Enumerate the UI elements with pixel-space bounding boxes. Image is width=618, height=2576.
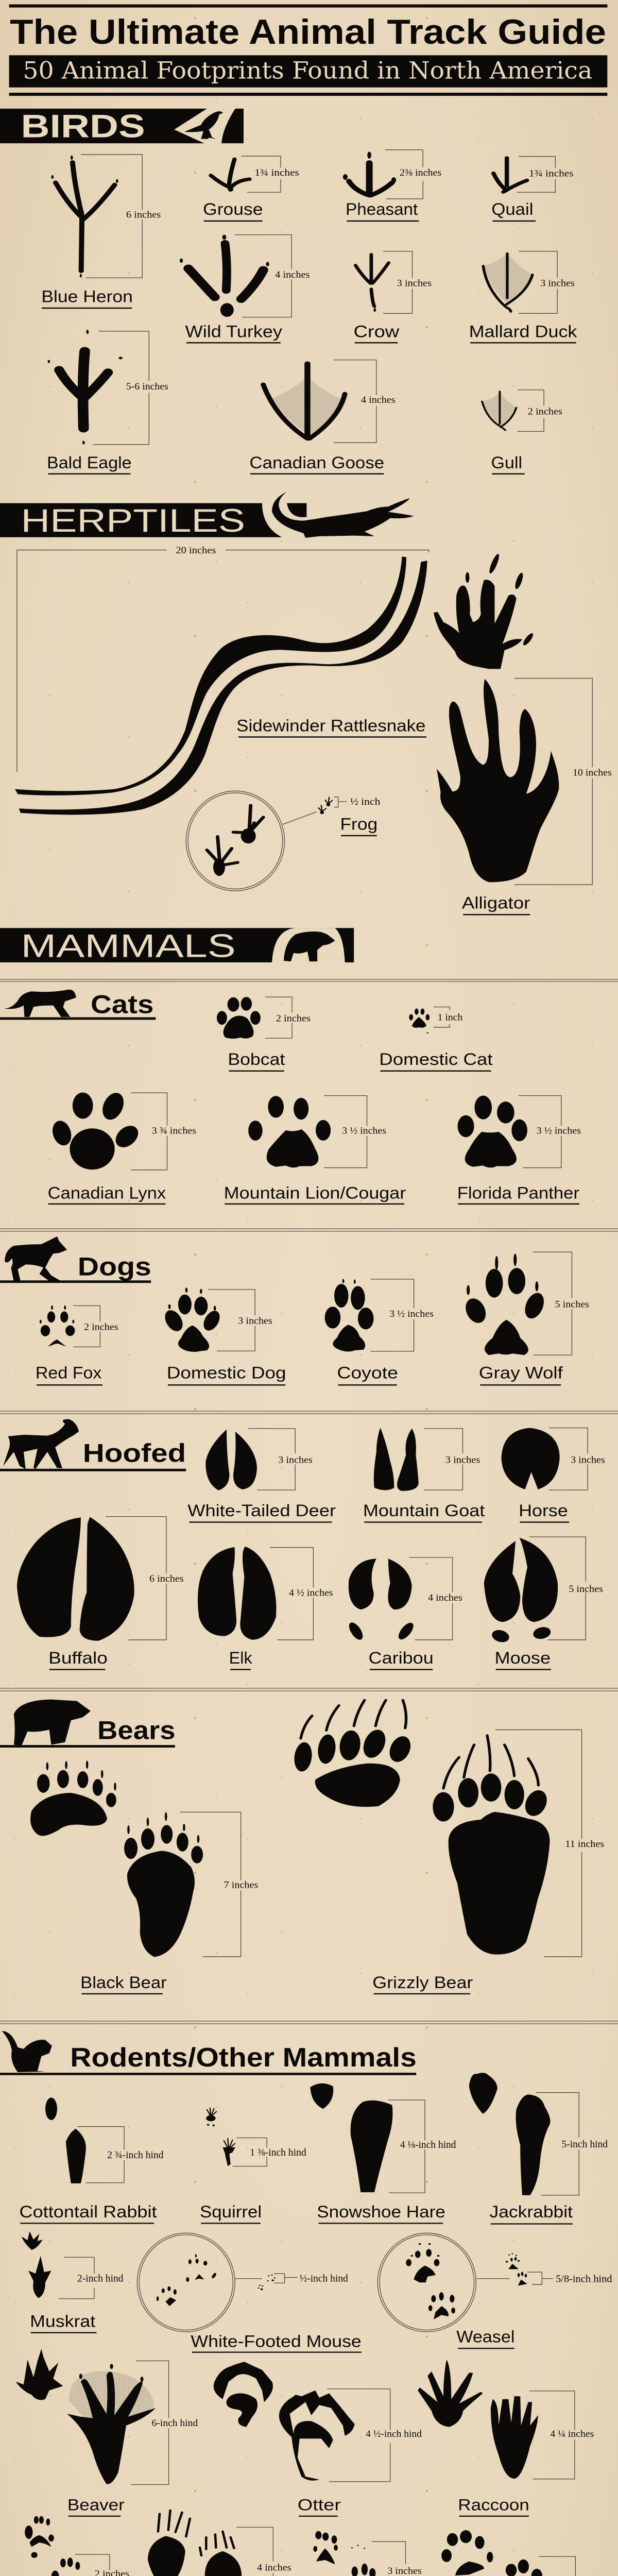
measurement <box>274 2273 348 2284</box>
measurement: 2 inches <box>276 1012 311 1024</box>
name: Quail <box>491 200 533 218</box>
track icon <box>441 2530 553 2576</box>
name: Caribou <box>369 1649 434 1667</box>
measurement: 3 ½ inches <box>389 1308 434 1319</box>
measurement <box>527 2272 612 2284</box>
name: Bald Eagle <box>47 453 132 472</box>
track icon <box>374 1428 419 1491</box>
name: Elk <box>229 1649 252 1667</box>
track icon <box>484 1538 558 1645</box>
measurement: 11 inches <box>565 1838 604 1850</box>
measurement <box>59 2257 124 2299</box>
track icon <box>22 2231 51 2298</box>
measurement: 3 inches <box>445 1454 480 1465</box>
front track <box>434 553 535 669</box>
measurement: 3 inches <box>540 277 575 289</box>
track icon <box>25 2516 86 2576</box>
track icon <box>343 151 396 195</box>
track icon <box>211 159 249 192</box>
heading: mammals banner: MAMMALS <box>21 928 236 964</box>
heading: birds banner: BIRDS <box>21 108 145 145</box>
track icon <box>206 2108 235 2166</box>
track icon <box>310 2083 392 2192</box>
measurement: 3 inches <box>397 277 432 289</box>
animal: Snowshoe Hare <box>310 2083 456 2224</box>
track icon <box>313 2531 376 2576</box>
animal: White-Tailed Deer <box>187 1429 336 1523</box>
name: Red Fox <box>36 1364 101 1382</box>
name: Muskrat <box>30 2312 96 2331</box>
measurement <box>73 1306 118 1347</box>
animal: Mountain Lion/Cougar <box>224 1096 406 1205</box>
name: Sidewinder Rattlesnake <box>236 717 426 735</box>
track icon <box>180 235 269 317</box>
front track <box>16 2349 63 2400</box>
measurement: 2⅜ inches <box>400 167 441 178</box>
name: Moose <box>494 1649 551 1667</box>
name: Grouse <box>203 200 263 218</box>
hind track <box>67 2364 156 2484</box>
measurement <box>518 1096 581 1168</box>
name: Florida Panther <box>457 1184 579 1202</box>
animal: Beaver <box>16 2349 198 2517</box>
measurement: 5-6 inches <box>126 381 168 392</box>
heading: birds banner <box>0 108 244 145</box>
measurement <box>533 1252 589 1355</box>
measurement: 4 ½ inches <box>289 1587 333 1598</box>
small tracks <box>318 797 332 814</box>
measurement <box>131 1093 196 1170</box>
track icon <box>17 1517 134 1641</box>
measurement <box>180 1812 258 1957</box>
track icon <box>501 1428 560 1489</box>
section: rodents lower rows and footer <box>0 2349 611 2576</box>
animal: Buffalo <box>17 1517 184 1670</box>
measurement <box>93 331 168 445</box>
animal: Muskrat <box>22 2231 124 2333</box>
animal: Frog <box>186 791 381 891</box>
name: Black Bear: Black Bear <box>80 1974 167 1992</box>
front track <box>30 1760 116 1836</box>
track icon <box>469 2073 550 2195</box>
measurement <box>529 1537 603 1640</box>
animal: Squirrel <box>200 2108 306 2224</box>
name: Cottontail Rabbit <box>19 2203 157 2222</box>
animal: Grizzly Bear <box>293 1700 604 1957</box>
measurement: 6 inches <box>149 1573 184 1584</box>
measurement <box>241 156 299 192</box>
measurement <box>370 1279 434 1351</box>
track icon <box>248 1096 331 1167</box>
animal: Bald Eagle <box>47 330 168 474</box>
measurement <box>434 1007 462 1027</box>
animal: Red Fox <box>36 1306 118 1385</box>
measurement: 3 inches <box>238 1315 272 1326</box>
magnifier circle <box>377 2233 510 2332</box>
name: Blue Heron <box>41 287 133 306</box>
measurement <box>495 1730 604 1957</box>
heading: bears: Bears <box>97 1716 176 1745</box>
measurement: 3 ¾ inches <box>152 1125 196 1136</box>
track icon <box>483 252 533 312</box>
animal: Florida Panther <box>457 1096 581 1205</box>
name: Frog <box>340 815 377 833</box>
name: Weasel <box>456 2328 514 2346</box>
name: Snowshoe Hare <box>317 2203 445 2222</box>
hind track <box>124 1812 203 1957</box>
small tracks <box>258 2275 276 2290</box>
track icon <box>51 156 118 278</box>
track icon <box>217 997 261 1039</box>
track icon <box>482 392 517 430</box>
section: cats and dogs <box>0 990 589 1385</box>
measurement <box>517 157 574 192</box>
animal: White-Footed Mouse <box>137 2233 362 2353</box>
small tracks <box>506 2253 527 2286</box>
measurement: 2-inch hind <box>77 2273 124 2284</box>
measurement: 6 inches <box>126 209 161 220</box>
measurement <box>235 235 310 317</box>
measurement: 1 inch <box>437 1011 462 1023</box>
animal: Blue Heron <box>41 155 161 309</box>
measurement: 2 inches <box>528 405 562 417</box>
heading: rodents/other mammals <box>0 2031 417 2075</box>
magnifier circle <box>186 791 317 891</box>
animal: Coyote <box>325 1279 434 1385</box>
hind track <box>279 2391 355 2481</box>
measurement <box>270 1548 333 1640</box>
name: Squirrel <box>200 2203 262 2222</box>
animal: Cottontail Rabbit <box>19 2097 164 2224</box>
heading: cats <box>0 990 156 1020</box>
measurement <box>409 1557 462 1640</box>
measurement <box>106 1517 184 1640</box>
animal: Domestic Cat <box>379 1007 493 1072</box>
measurement: 2 inches <box>84 1321 118 1332</box>
animal: Badger <box>313 2531 422 2576</box>
heading: cats: Cats <box>91 990 153 1019</box>
hind track <box>437 679 559 882</box>
hind track <box>491 2396 538 2479</box>
section: header and birds <box>0 4 607 474</box>
name: Buffalo <box>48 1649 108 1667</box>
name: Mountain Goat <box>363 1501 485 1520</box>
track icon <box>325 1279 374 1351</box>
measurement: 1¾ inches <box>529 167 574 179</box>
name: Gull <box>491 453 522 472</box>
heading: herptiles banner: HERPTILES <box>21 503 245 539</box>
animal: Horse <box>501 1428 605 1523</box>
animal: Crow <box>353 251 432 343</box>
track icon <box>263 364 345 438</box>
measurement <box>81 155 161 278</box>
animal: Sidewinder Rattlesnake <box>15 545 429 815</box>
measurement <box>424 1429 480 1490</box>
animal: Raccoon <box>418 2360 594 2517</box>
measurement <box>17 545 429 772</box>
measurement <box>131 2361 198 2484</box>
animal: Quail <box>491 157 574 222</box>
measurement: 3 inches <box>387 2565 422 2576</box>
title banner <box>9 4 607 96</box>
snake track <box>15 556 427 815</box>
name: Mountain Lion/Cougar <box>224 1184 406 1202</box>
measurement <box>265 997 311 1038</box>
measurement <box>383 251 432 313</box>
heading: dogs: Dogs <box>78 1252 151 1281</box>
section: herptiles <box>0 492 612 964</box>
hind track <box>433 1735 550 1955</box>
animal: Mallard Duck <box>469 251 577 343</box>
measurement <box>388 2100 456 2193</box>
measurement: 3 inches <box>571 1454 605 1465</box>
measurement: ½ inch <box>350 795 381 807</box>
measurement: ½-inch hind <box>300 2273 348 2284</box>
animal: Grouse <box>203 156 299 222</box>
measurement <box>549 1428 605 1490</box>
track icon <box>40 1306 75 1347</box>
track icon <box>45 2097 86 2183</box>
heading: bears <box>0 1700 176 1748</box>
name: Gray Wolf <box>479 1364 563 1382</box>
name: Crow <box>353 322 400 341</box>
measurement <box>248 1429 313 1490</box>
heading: herptiles banner <box>0 492 414 539</box>
animal: Gull <box>482 390 562 474</box>
measurement: 5 inches <box>569 1583 603 1595</box>
animal: Gray Wolf <box>462 1252 589 1385</box>
section: hoofed and bears <box>0 1419 605 1957</box>
measurement: 4 inches <box>428 1592 462 1603</box>
name: Bobcat <box>228 1050 285 1069</box>
measurement <box>233 2138 306 2166</box>
animal: Elk <box>198 1547 333 1670</box>
animal: Canadian Goose <box>249 360 396 474</box>
animal: Black Bear <box>30 1760 258 1957</box>
measurement: 3 ½ inches <box>537 1125 581 1136</box>
track icon <box>346 1558 416 1641</box>
heading: mammals banner <box>0 928 354 964</box>
heading: hoofed: Hoofed <box>83 1439 186 1468</box>
animal: Bobcat <box>217 997 311 1072</box>
measurement: 4 ½-inch hind <box>366 2428 422 2439</box>
name: White-Footed Mouse <box>191 2332 362 2351</box>
track icon <box>50 1091 143 1170</box>
name: Domestic Cat <box>379 1050 493 1069</box>
measurement: 7 inches <box>224 1879 258 1890</box>
measurement: 3 inches <box>278 1454 313 1465</box>
measurement <box>529 2391 594 2479</box>
measurement: 6-inch hind <box>152 2417 198 2428</box>
name: Canadian Goose <box>249 453 384 472</box>
measurement <box>372 2541 422 2576</box>
measurement: 4 ⅛-inch hind <box>400 2139 456 2150</box>
measurement: 4 inches <box>361 394 396 405</box>
animal: Alligator <box>434 553 612 915</box>
measurement <box>385 150 441 199</box>
track icon <box>162 1287 223 1352</box>
measurement <box>236 2527 291 2576</box>
measurement <box>327 2389 422 2482</box>
track icon <box>198 1547 276 1640</box>
name: Raccoon <box>458 2496 529 2514</box>
measurement <box>518 390 562 431</box>
animal: Canadian Lynx <box>48 1091 196 1205</box>
animal: Porcupine <box>148 2510 291 2576</box>
measurement <box>208 1290 272 1351</box>
animal: Marten <box>25 2516 129 2576</box>
measurement <box>324 1096 386 1168</box>
animal: Mountain Goat <box>363 1428 485 1523</box>
track icon <box>409 1009 430 1033</box>
animal: Otter <box>214 2362 422 2517</box>
track icon <box>458 1096 527 1167</box>
measurement: 5 inches <box>555 1298 589 1310</box>
name: Canadian Lynx <box>48 1184 166 1202</box>
front track <box>293 1700 414 1807</box>
measurement <box>75 2554 129 2576</box>
section dividers <box>0 979 618 2024</box>
measurement: 4 inches <box>257 2562 291 2573</box>
animal: Jackrabbit <box>469 2073 608 2225</box>
name: Wild Turkey <box>185 322 283 341</box>
name: Pheasant <box>346 200 418 218</box>
name: White-Tailed Deer <box>187 1501 336 1520</box>
track icon <box>148 2510 242 2576</box>
measurement: 3 ½ inches <box>342 1125 386 1136</box>
name: Grizzly Bear: Grizzly Bear <box>372 1974 473 1992</box>
animal: Weasel <box>377 2233 612 2349</box>
front track <box>214 2362 273 2427</box>
track icon <box>205 1430 257 1490</box>
measurement: 20 inches <box>176 545 216 556</box>
animal: Domestic Dog <box>162 1287 286 1385</box>
heading: dogs <box>0 1236 151 1283</box>
track icon <box>48 330 123 445</box>
name: Horse <box>519 1501 568 1520</box>
animal: Moose <box>484 1537 603 1670</box>
measurement: 1 ⅜-inch hind <box>250 2147 306 2158</box>
animal: Caribou <box>346 1557 462 1670</box>
animal: Pheasant <box>343 150 441 222</box>
animal: Wild Turkey <box>180 235 310 343</box>
name: Mallard Duck <box>469 322 577 341</box>
name: Beaver <box>67 2496 125 2514</box>
track icon <box>493 158 527 192</box>
name: Domestic Dog <box>167 1364 286 1382</box>
measurement <box>536 2093 608 2195</box>
name: Otter <box>298 2496 341 2514</box>
measurement: 1¾ inches <box>254 167 299 178</box>
measurement <box>519 251 575 313</box>
measurement: 2 ¾-inch hind <box>107 2149 164 2160</box>
measurement: 4 inches <box>275 269 310 280</box>
heading: hoofed <box>0 1419 186 1471</box>
measurement <box>78 2127 164 2183</box>
name: Alligator <box>462 894 530 912</box>
animal: Fisher <box>441 2530 609 2576</box>
track icon <box>355 255 389 312</box>
section: rodents upper rows <box>0 1974 612 2353</box>
front track <box>418 2360 483 2427</box>
name: Jackrabbit <box>490 2203 573 2222</box>
track icon <box>462 1253 547 1355</box>
heading: rodents/other mammals: Rodents/Other Mammals <box>70 2042 417 2072</box>
magnifier circle <box>137 2233 262 2332</box>
measurement <box>333 360 396 443</box>
measurement <box>334 795 381 807</box>
name: Coyote <box>337 1364 398 1382</box>
measurement <box>514 679 612 885</box>
measurement <box>539 2556 609 2576</box>
measurement: 4 ¼ inches <box>550 2428 594 2439</box>
